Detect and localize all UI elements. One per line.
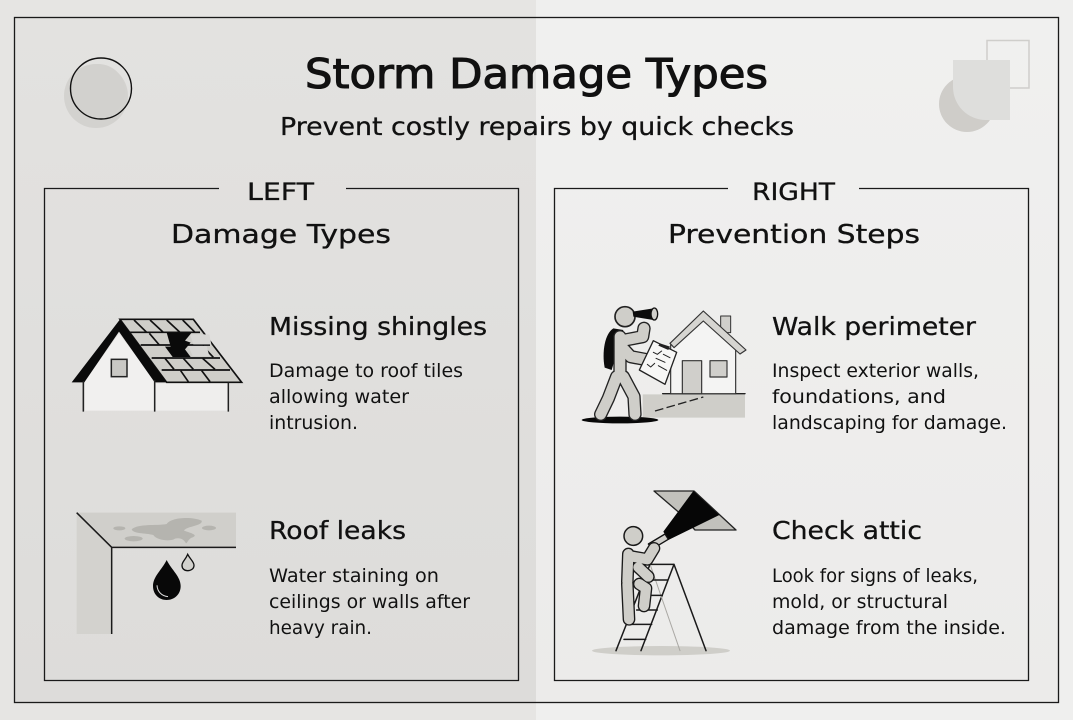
- item description: walk perimeter: foundations, and: [772, 386, 946, 408]
- item description: walk perimeter: Inspect exterior walls,: [772, 360, 979, 382]
- item heading: roof leaks: Roof leaks: [269, 516, 406, 545]
- icon: ceiling leak: [77, 513, 236, 634]
- item description: missing shingles: intrusion.: [269, 412, 358, 434]
- left panel heading: Damage Types: [171, 220, 391, 250]
- walker limbs: dark outline under lighter fill: [601, 328, 648, 414]
- item description: roof leaks: heavy rain.: [269, 617, 372, 639]
- item heading: missing shingles: Missing shingles: [269, 312, 487, 341]
- icon: person inspecting house: [582, 307, 746, 423]
- icon: damaged roof house: [72, 319, 242, 412]
- item heading: check attic: Check attic: [772, 516, 922, 545]
- right panel label: RIGHT: [752, 178, 835, 206]
- item description: roof leaks: [269, 565, 470, 639]
- item description: missing shingles: allowing water: [269, 386, 409, 408]
- item description: walk perimeter: [772, 360, 1007, 434]
- title: Storm Damage Types: [305, 50, 768, 98]
- item description: roof leaks: Water staining on: [269, 565, 439, 587]
- item heading: walk perimeter: Walk perimeter: [772, 312, 977, 341]
- right panel heading: Prevention Steps: [668, 220, 920, 250]
- panel: right prevention steps: [554, 178, 1028, 680]
- item description: check attic: mold, or structural: [772, 591, 948, 613]
- item description: roof leaks: ceilings or walls after: [269, 591, 470, 613]
- left panel label: LEFT: [247, 178, 314, 206]
- item description: missing shingles: Damage to roof tiles: [269, 360, 463, 382]
- icon: person on ladder with flashlight: [592, 491, 736, 655]
- item description: check attic: [772, 565, 1006, 639]
- climber limbs: dark outline under lighter fill: [627, 548, 654, 619]
- item description: walk perimeter: landscaping for damage.: [772, 412, 1007, 434]
- item description: missing shingles: [269, 360, 463, 434]
- icon: right decorative shapes: [939, 40, 1029, 132]
- icon: left decorative circle: [64, 58, 132, 128]
- panel: left damage types: [44, 178, 518, 680]
- subtitle: Prevent costly repairs by quick checks: [280, 112, 794, 141]
- item description: check attic: Look for signs of leaks,: [772, 565, 978, 587]
- item description: check attic: damage from the inside.: [772, 617, 1006, 639]
